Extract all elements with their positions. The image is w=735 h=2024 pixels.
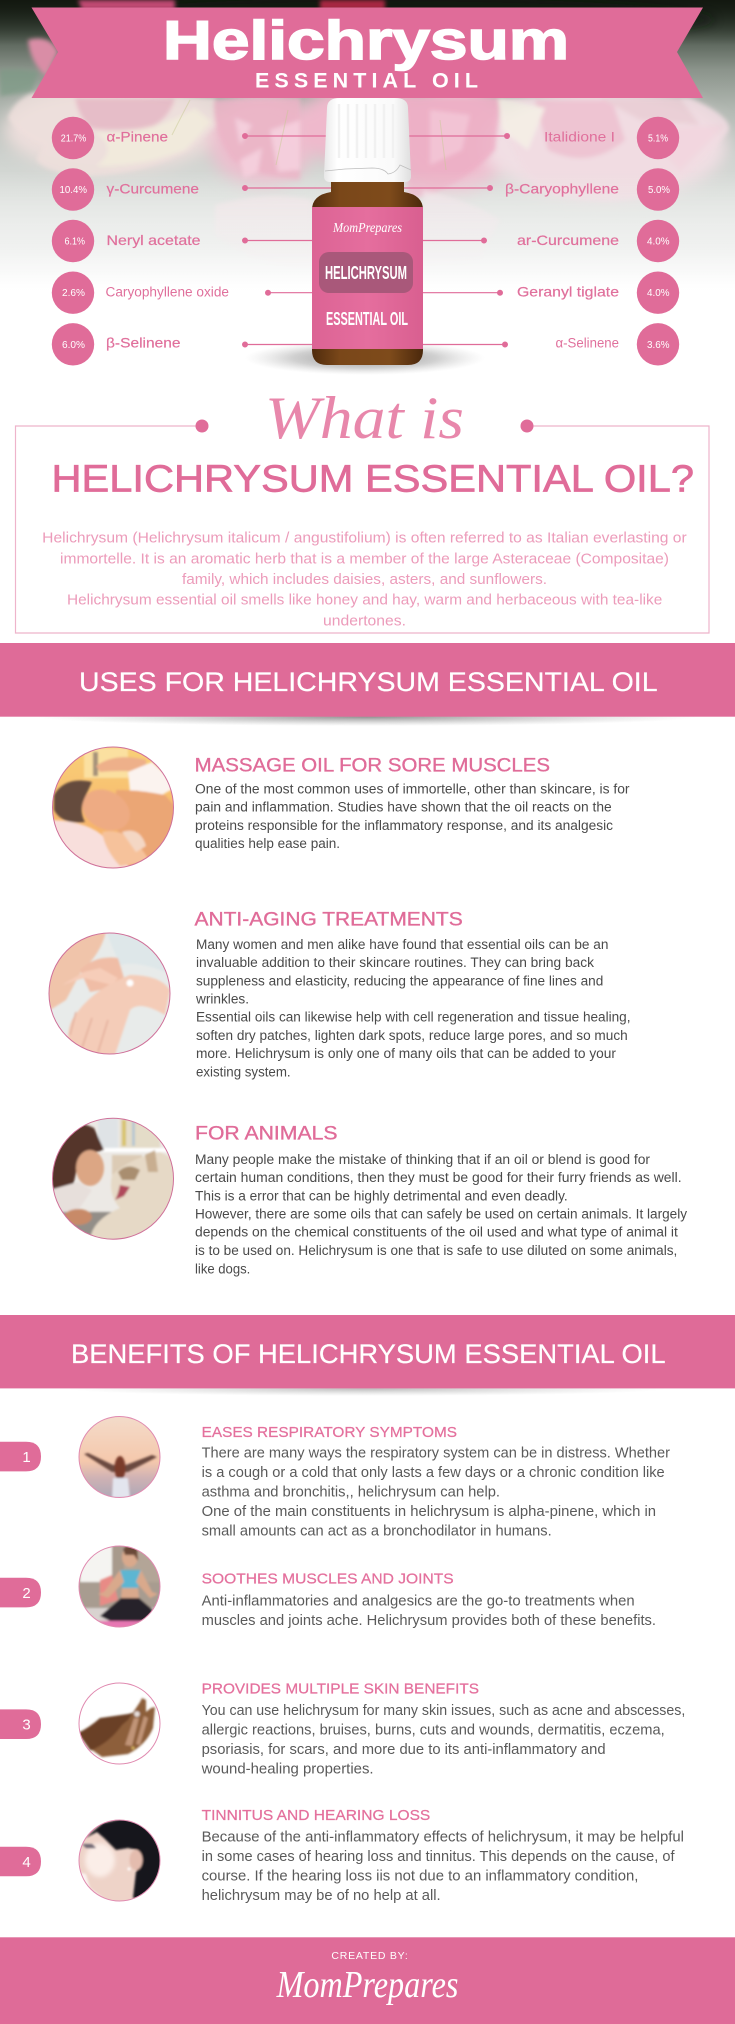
text block: tinnitus: Because of the anti-inflammatory effects of helichrysum, it may be helpful — [202, 1830, 684, 1846]
bottle label: name pill — [319, 252, 413, 293]
constituent: ar-curcumene: 4.0% — [647, 236, 670, 248]
text block: muscles and joints — [202, 1571, 656, 1629]
text block: tinnitus: TINNITUS AND HEARING LOSS — [202, 1807, 430, 1824]
number tag 2 — [0, 1578, 41, 1607]
constituent: alpha-selinene — [556, 323, 679, 365]
constituent: neryl acetate — [52, 220, 201, 262]
text block: anti-aging: Essential oils can likewise help with cell regeneration and tissue healing, — [196, 1010, 630, 1026]
constituent: geranyl tiglate — [517, 272, 679, 314]
text block: respiratory: asthma and bronchitis,, helichrysum can help. — [202, 1484, 500, 1500]
description paragraph: undertones. — [323, 612, 406, 629]
lower soft pink — [218, 197, 310, 214]
constituent: alpha-pinene: 21.7% — [61, 134, 86, 144]
panel: what is helichrysum — [16, 385, 709, 633]
constituent: ar-curcumene — [517, 220, 679, 262]
photo: woman profile with ear — [78, 1818, 162, 1904]
bottle label: essential oil: ESSENTIAL OIL — [326, 308, 408, 329]
constituent: italidione I: Italidione I — [544, 129, 615, 145]
text block: anti-aging: Many women and men alike have found that essential oils can be an — [196, 937, 608, 953]
constituent: neryl acetate: 6.1% — [64, 236, 85, 248]
constituent: italidione I — [544, 117, 679, 159]
text block: skin benefits — [201, 1680, 685, 1777]
constituent: alpha-selinene: α-Selinene — [556, 335, 619, 351]
text block: massage oil: proteins responsible for the inflammatory response, and its analgesic — [195, 818, 613, 834]
right constituents list — [505, 117, 679, 365]
text block: for animals: certain human conditions, then they must be good for their furry friends as well. — [195, 1170, 682, 1186]
heading: what is: What is — [265, 385, 464, 451]
text block: anti-aging — [194, 909, 630, 1080]
text block: skin benefits: You can use helichrysum for many skin issues, such as acne and abscesses, — [202, 1703, 685, 1719]
text block: tinnitus: in some cases of hearing loss and tinnitus. This depends on the cause, of — [202, 1849, 676, 1865]
description paragraph — [42, 530, 687, 629]
constituent: alpha-selinene: 3.6% — [647, 340, 670, 351]
text block: respiratory: EASES RESPIRATORY SYMPTOMS — [202, 1424, 457, 1441]
essential oil bottle — [245, 98, 485, 375]
text block: anti-aging: invaluable addition to their skincare routines. They can bring back — [196, 955, 595, 971]
number tag 2: 2 — [22, 1585, 31, 1602]
photo: hands with cream — [48, 932, 172, 1056]
left flower — [8, 93, 219, 176]
text block: for animals: However, there are some oils that can safely be used on certain animals. It largely — [195, 1207, 688, 1223]
constituent: beta-caryophyllene — [505, 168, 679, 211]
text block: massage oil: qualities help ease pain. — [195, 836, 340, 852]
text block: tinnitus: course. If the hearing loss iis not due to an inflammatory condition, — [202, 1868, 638, 1884]
text block: anti-aging: ANTI-AGING TREATMENTS — [194, 909, 463, 930]
number tag 3: 3 — [22, 1716, 31, 1734]
text block: anti-aging: suppleness and elasticity, reducing the appearance of fine lines and — [196, 973, 603, 989]
text block: tinnitus: helichrysum may be of no help at all. — [202, 1888, 441, 1904]
constituent: gamma-curcumene: 10.4% — [60, 185, 87, 196]
text block: for animals: Many people make the mistake of thinking that if an oil or blend is good for — [195, 1152, 650, 1168]
constituent: beta-selinene — [52, 323, 181, 365]
number tag 4 — [0, 1847, 41, 1876]
constituent: beta-caryophyllene: 5.0% — [648, 185, 670, 196]
hero panel: flower background — [0, 0, 735, 268]
description paragraph: Helichrysum essential oil smells like honey and hay, warm and herbaceous with tea-like — [67, 592, 662, 609]
constituent: caryophyllene oxide: Caryophyllene oxide — [106, 284, 229, 300]
footer — [0, 1937, 735, 2024]
text block: anti-aging: existing system. — [196, 1064, 291, 1080]
constituent: gamma-curcumene: γ-Curcumene — [106, 180, 199, 196]
bottle label: brand: MomPrepares — [332, 221, 402, 236]
constituent: alpha-pinene: α-Pinene — [106, 129, 168, 145]
text block: skin benefits: PROVIDES MULTIPLE SKIN BENEFITS — [202, 1680, 479, 1697]
description paragraph: Helichrysum (Helichrysum italicum / angustifolium) is often referred to as Italian everlasting or — [42, 530, 687, 547]
number tag 4: 4 — [22, 1854, 31, 1871]
text block: massage oil: MASSAGE OIL FOR SORE MUSCLES — [195, 756, 550, 777]
text block: muscles and joints: muscles and joints ache. Helichrysum provides both of these benefits. — [202, 1613, 656, 1629]
constituent: geranyl tiglate: 4.0% — [647, 288, 670, 299]
connector lines for oil constituents — [243, 134, 509, 347]
text block: massage oil: One of the most common uses of immortelle, other than skincare, is for — [195, 781, 630, 797]
photo: massage — [50, 745, 178, 872]
text block: skin benefits: allergic reactions, bruises, burns, cuts and wounds, dermatitis, eczema, — [202, 1722, 665, 1738]
text block: anti-aging: wrinkles. — [195, 991, 249, 1007]
footer: brand: MomPrepares — [276, 1964, 458, 2006]
constituent: caryophyllene oxide — [52, 272, 229, 314]
title banner — [32, 8, 703, 98]
heading: helichrysum essential oil: HELICHRYSUM ESSENTIAL OIL? — [52, 459, 694, 501]
constituent: neryl acetate: Neryl acetate — [106, 232, 201, 248]
constituent: geranyl tiglate: Geranyl tiglate — [517, 284, 619, 300]
constituent: beta-selinene: 6.0% — [62, 340, 85, 351]
text block: massage oil: pain and inflammation. Studies have shown that the oil reacts on the — [195, 800, 612, 816]
photo: hands with skin product — [78, 1682, 162, 1766]
description paragraph: family, which includes daisies, asters, and sunflowers. — [182, 571, 547, 588]
constituent: gamma-curcumene — [52, 168, 199, 211]
text block: for animals: is to be used on. Helichrysum is one that is safe to use diluted on some animals, — [195, 1243, 677, 1259]
constituent: caryophyllene oxide: 2.6% — [62, 288, 85, 299]
center-right flower — [405, 98, 500, 200]
photo: arms raised at sunrise — [78, 1415, 162, 1499]
constituent: alpha-pinene — [52, 117, 168, 159]
text block: for animals: like dogs. — [195, 1261, 250, 1277]
description paragraph: immortelle. It is an aromatic herb that is a member of the large Asteraceae (Compositae) — [60, 550, 669, 567]
photo: yoga — [78, 1544, 162, 1630]
number tag 1: 1 — [22, 1449, 31, 1466]
text block: respiratory — [202, 1424, 670, 1539]
text block: respiratory: small amounts can act as a bronchodilator in humans. — [202, 1523, 552, 1539]
section band: uses — [0, 643, 735, 726]
text block: for animals: FOR ANIMALS — [195, 1123, 338, 1144]
constituent: beta-selinene: β-Selinene — [106, 335, 181, 351]
left constituents list — [52, 117, 229, 365]
section band: benefits — [0, 1315, 735, 1396]
text block: muscles and joints: Anti-inflammatories and analgesics are the go-to treatments when — [202, 1594, 635, 1610]
text block: skin benefits: wound-healing properties. — [201, 1761, 374, 1777]
text block: respiratory: is a cough or a cold that only lasts a few days or a chronic condition like — [202, 1465, 665, 1481]
subtitle: Essential Oil: ESSENTIAL OIL — [255, 68, 478, 92]
title: Helichrysum: Helichrysum — [163, 9, 569, 71]
section band: uses: USES FOR HELICHRYSUM ESSENTIAL OIL — [79, 667, 658, 697]
constituent: ar-curcumene: ar-Curcumene — [517, 232, 619, 248]
right flower — [502, 98, 730, 139]
text block: for animals: This is a error that can be highly detrimental and even deadly. — [195, 1188, 568, 1204]
text block: for animals: depends on the chemical constituents of the oil used and what type of animal it — [195, 1225, 678, 1241]
text block: anti-aging: more. Helichrysum is only one of many oils that can be added to your — [196, 1046, 616, 1062]
text block: tinnitus — [202, 1807, 684, 1904]
number tag 1 — [0, 1442, 41, 1471]
text block: respiratory: One of the main constituents in helichrysum is alpha-pinene, which in — [202, 1504, 656, 1520]
photo: woman and dog — [50, 1116, 176, 1242]
text block: muscles and joints: SOOTHES MUSCLES AND JOINTS — [202, 1571, 454, 1588]
constituent: italidione I: 5.1% — [648, 134, 668, 144]
text block: skin benefits: psoriasis, for scars, and more due to its anti-inflammatory and — [202, 1742, 606, 1758]
bottle label: name pill: HELICHRYSUM — [325, 262, 407, 283]
constituent: beta-caryophyllene: β-Caryophyllene — [505, 180, 619, 196]
number tag 3 — [0, 1709, 41, 1739]
footer: created by: CREATED BY: — [331, 1950, 408, 1962]
text block: for animals — [195, 1123, 688, 1277]
text block: anti-aging: soften dry patches, lighten dark spots, reduce large pores, and so much — [196, 1028, 628, 1044]
text block: massage oil — [195, 756, 630, 852]
text block: respiratory: There are many ways the respiratory system can be in distress. Whether — [202, 1445, 670, 1461]
center-left flower — [214, 98, 300, 180]
section band: benefits: BENEFITS OF HELICHRYSUM ESSENTIAL OIL — [71, 1339, 666, 1369]
